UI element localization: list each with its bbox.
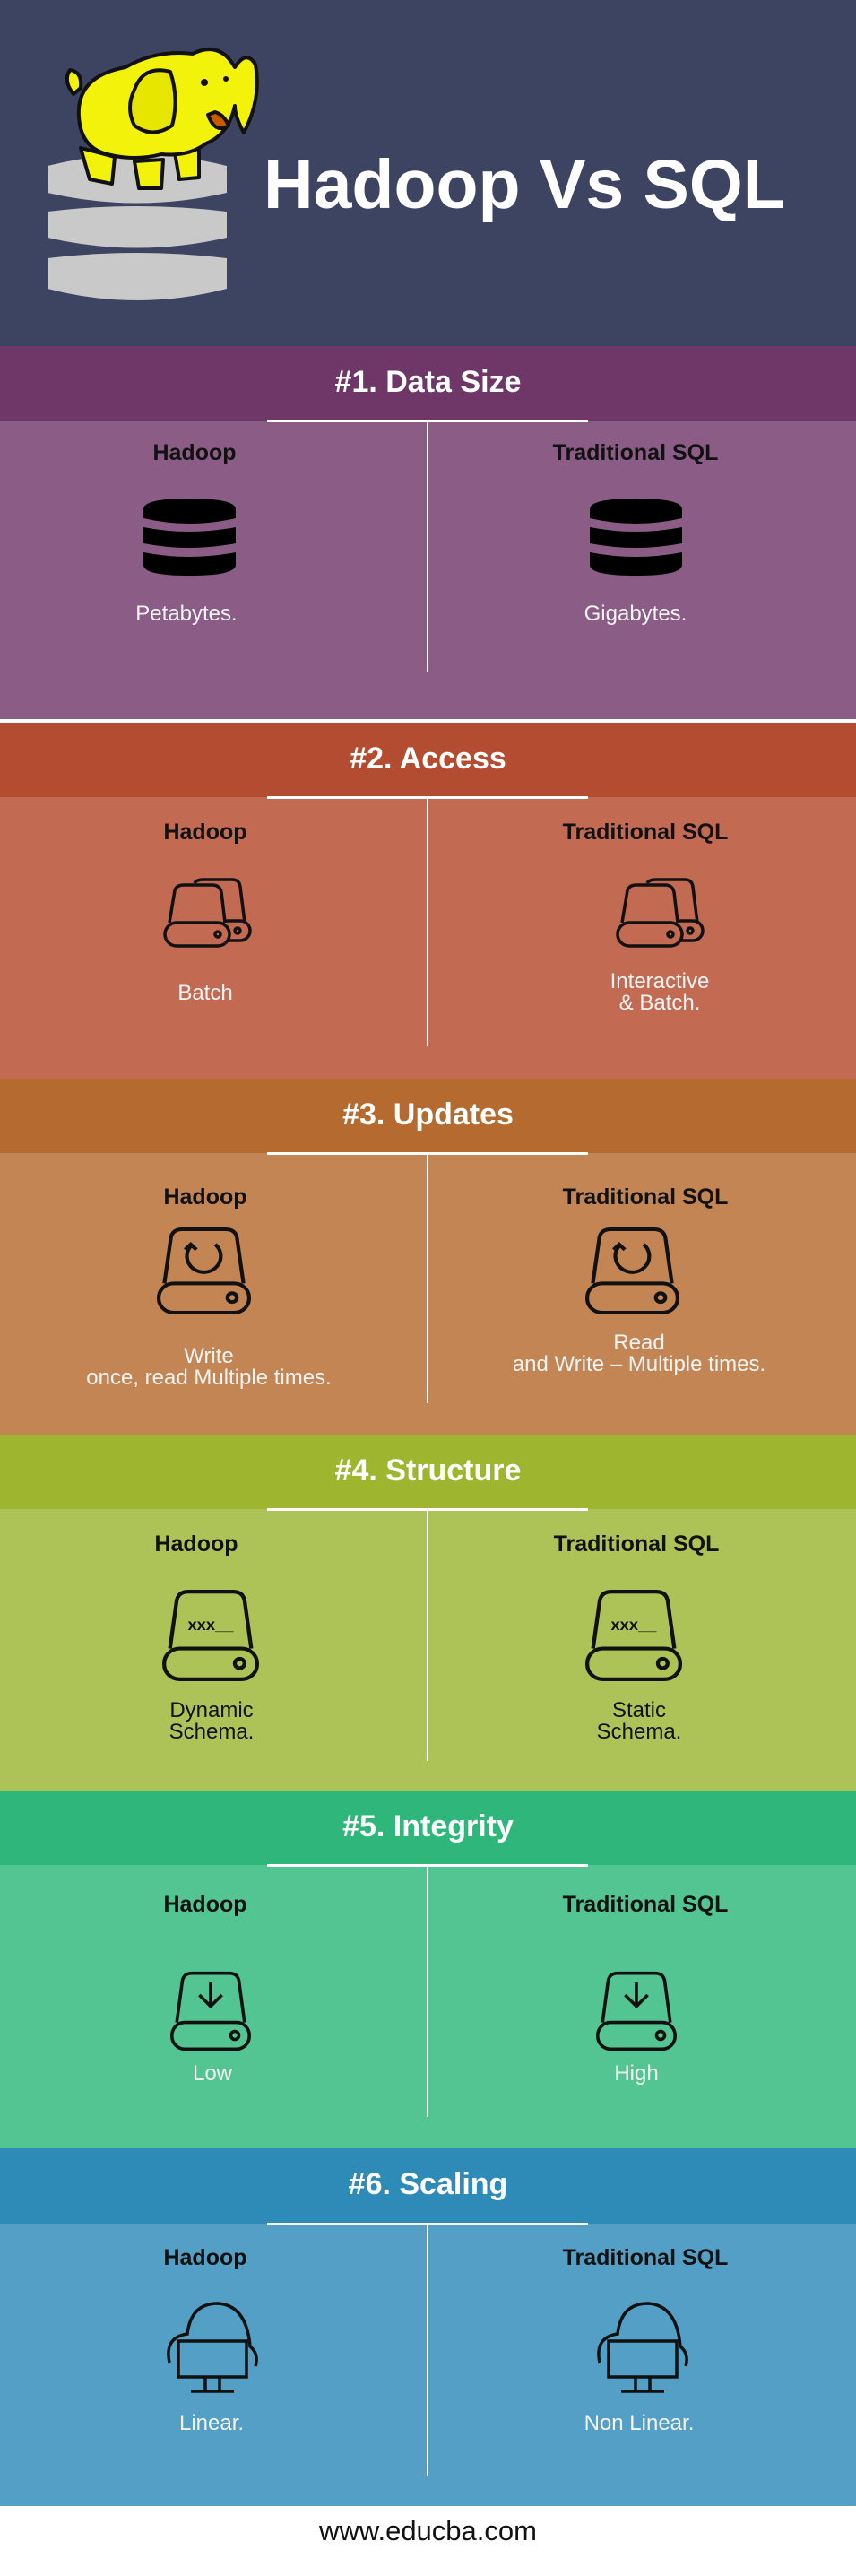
icon: drive refresh right xyxy=(585,1227,679,1314)
value right: Schema. xyxy=(597,1720,681,1744)
value left xyxy=(86,1344,332,1390)
icon: drive download right xyxy=(596,1971,677,2051)
section 2: access xyxy=(0,723,856,1079)
section 1: data size xyxy=(0,346,856,719)
icon: drives right xyxy=(616,878,705,948)
logo: database with elephant xyxy=(48,47,259,300)
label: hadoop: Hadoop xyxy=(163,2245,247,2270)
label: hadoop: Hadoop xyxy=(163,1184,247,1210)
icon: drive schema right xyxy=(585,1590,682,1681)
value left: Low xyxy=(193,2061,232,2086)
value right: High xyxy=(614,2061,659,2086)
section 4: structure xyxy=(0,1435,856,1791)
icon: drive download left xyxy=(170,1971,251,2051)
label: hadoop: Hadoop xyxy=(163,820,247,845)
value left: Linear. xyxy=(179,2411,244,2435)
label: hadoop: Hadoop xyxy=(152,440,237,465)
icon: drive refresh left xyxy=(157,1227,251,1314)
icon: drive schema right: xxx__ xyxy=(610,1616,658,1634)
header xyxy=(0,0,856,346)
label: hadoop: Hadoop xyxy=(154,1531,238,1557)
value right xyxy=(513,1331,765,1376)
icon: cloud monitor right xyxy=(597,2302,688,2393)
icon: database left xyxy=(143,499,236,576)
section 6: scaling xyxy=(0,2148,856,2506)
value right xyxy=(610,969,709,1015)
value left: Dynamic xyxy=(169,1698,254,1722)
heading: #2. Access xyxy=(350,742,506,776)
value left: Batch xyxy=(177,981,233,1005)
value left: Write xyxy=(184,1344,234,1368)
label: sql: Traditional SQL xyxy=(563,1184,728,1210)
footer url: www.educba.com xyxy=(319,2515,537,2546)
value right: Static xyxy=(612,1698,666,1722)
value right: Read xyxy=(613,1331,665,1355)
value right xyxy=(597,1698,681,1744)
value right: Interactive xyxy=(610,969,709,993)
value left: Schema. xyxy=(169,1720,254,1744)
icon: cloud monitor left xyxy=(167,2302,258,2393)
value left: Petabytes. xyxy=(135,602,238,626)
section 5: integrity xyxy=(0,1791,856,2148)
heading: #3. Updates xyxy=(342,1097,514,1132)
value right: Non Linear. xyxy=(584,2411,694,2435)
heading: #1. Data Size xyxy=(335,365,521,399)
label: sql: Traditional SQL xyxy=(554,1531,719,1557)
label: sql: Traditional SQL xyxy=(563,820,728,845)
label: hadoop: Hadoop xyxy=(163,1892,247,1917)
icon: drives left xyxy=(163,878,252,948)
value right: and Write – Multiple times. xyxy=(513,1352,765,1376)
label: sql: Traditional SQL xyxy=(563,1892,728,1917)
heading: #4. Structure xyxy=(335,1453,521,1487)
icon: drive schema left: xxx__ xyxy=(187,1616,235,1634)
title: Hadoop Vs SQL xyxy=(264,146,785,223)
value right: & Batch. xyxy=(619,991,700,1015)
icon: drive schema left xyxy=(162,1590,259,1681)
label: sql: Traditional SQL xyxy=(553,440,718,465)
value left xyxy=(169,1698,254,1744)
heading: #5. Integrity xyxy=(342,1809,514,1843)
value left: once, read Multiple times. xyxy=(86,1366,332,1390)
icon: database right xyxy=(590,499,682,576)
heading: #6. Scaling xyxy=(349,2167,507,2201)
section 3: updates xyxy=(0,1079,856,1435)
value right: Gigabytes. xyxy=(584,602,687,626)
label: sql: Traditional SQL xyxy=(563,2245,728,2270)
